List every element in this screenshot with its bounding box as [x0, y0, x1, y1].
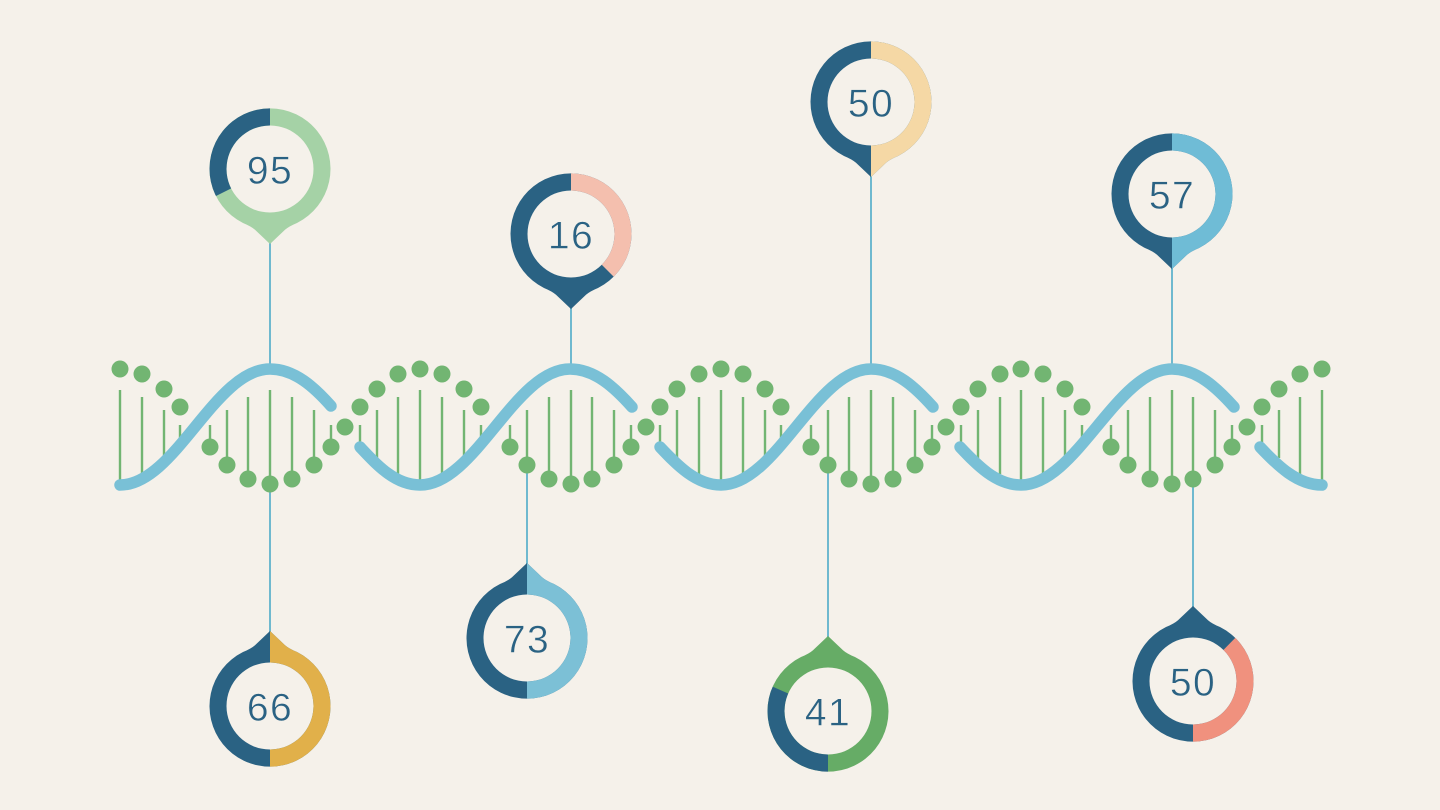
pin: 57	[1112, 133, 1232, 269]
pin: 50 bottom	[1132, 606, 1254, 742]
connector lines	[270, 173, 1193, 640]
pin: 41: 41	[805, 692, 851, 734]
pin: 16	[510, 173, 632, 309]
pin: 41	[768, 636, 888, 772]
pin: 50 bottom: 50	[1170, 662, 1216, 704]
pin: 73	[466, 563, 588, 699]
pin: 16: 16	[548, 214, 594, 258]
pin: 66	[210, 631, 330, 767]
pin: 73: 73	[504, 618, 550, 662]
pin: 50 top	[810, 41, 932, 177]
base pair sticks	[120, 390, 1322, 484]
pin: 57: 57	[1149, 174, 1195, 218]
blue ribbon strand	[120, 369, 1322, 485]
dna helix	[112, 360, 1330, 492]
green dots strand	[112, 360, 1330, 492]
pin: 66: 66	[247, 686, 293, 730]
pin: 95: 95	[247, 150, 293, 192]
pin: 95	[210, 108, 330, 244]
pin: 50 top: 50	[848, 82, 894, 126]
